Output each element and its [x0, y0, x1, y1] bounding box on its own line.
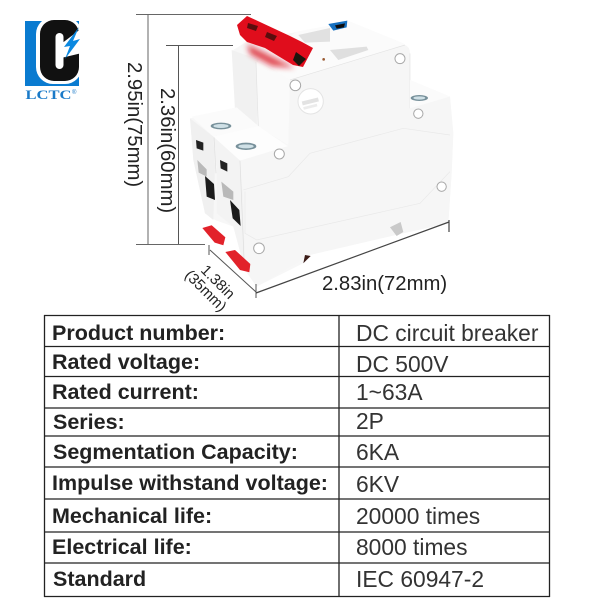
left side faces — [190, 118, 215, 220]
lower front face — [240, 97, 453, 287]
row: product number: DC circuit breaker — [356, 320, 539, 346]
upper block top face — [258, 22, 408, 80]
logo text: LCTC — [26, 88, 72, 102]
row: impulse withstand voltage: Impulse withstand voltage: — [52, 471, 328, 495]
row: series — [53, 408, 384, 434]
row: rated current — [52, 379, 423, 405]
dimension: depth 1.38in: 1.38in — [197, 262, 238, 303]
row: electrical life: 8000 times — [356, 534, 468, 560]
dimension: height 2.36in: 2.36in(60mm) — [156, 88, 178, 213]
row: segmentation capacity — [53, 439, 400, 465]
logo: LCTC — [25, 17, 82, 102]
row: mechanical life: Mechanical life: — [52, 504, 212, 528]
side slots — [196, 140, 227, 172]
dimension: depth 1.38in — [181, 245, 256, 315]
dimension: width 2.83in: 2.83in(72mm) — [322, 273, 447, 295]
slot dial — [298, 89, 323, 114]
upper block front face — [288, 45, 410, 147]
dimension: width 2.83in — [256, 220, 449, 295]
row: mechanical life: 20000 times — [356, 503, 480, 529]
row: standard — [53, 566, 484, 592]
din rail slot — [390, 222, 403, 236]
top label — [298, 28, 330, 43]
red toggle handle — [237, 16, 313, 67]
row: standard: IEC 60947-2 — [356, 566, 484, 592]
row: rated voltage: DC 500V — [356, 351, 449, 377]
dimension: height 2.95in: 2.95in(75mm) — [123, 62, 145, 187]
dimension: height 2.36in — [156, 46, 233, 244]
main body — [190, 22, 453, 287]
screws — [211, 123, 231, 129]
product photo: DC circuit breaker — [190, 16, 453, 287]
dimension: depth 1.38in: (35mm) — [181, 267, 230, 315]
red release tabs — [202, 225, 250, 272]
red glow under toggle — [247, 44, 295, 68]
upper block left face — [232, 50, 258, 127]
row: product number: Product number: — [52, 321, 225, 345]
row: segmentation capacity: Segmentation Capacity: — [53, 440, 298, 464]
row: rated current: Rated current: — [52, 380, 199, 404]
row: series: 2P — [356, 408, 384, 434]
row: product number — [52, 320, 539, 346]
row: rated voltage: Rated voltage: — [52, 350, 200, 374]
specification table — [44, 315, 550, 597]
lower terminals — [192, 107, 258, 137]
rivet holes — [254, 54, 446, 254]
row: electrical life — [52, 534, 468, 560]
dimension: height 2.95in — [123, 14, 251, 244]
row: rated voltage — [52, 350, 449, 377]
row: electrical life: Electrical life: — [52, 535, 192, 559]
row: standard: Standard — [53, 567, 146, 591]
table grid — [44, 315, 550, 597]
row: series: Series: — [53, 410, 125, 434]
row: mechanical life — [52, 503, 480, 529]
row: segmentation capacity: 6KA — [356, 439, 400, 465]
row: rated current: 1~63A — [356, 379, 423, 405]
row: impulse withstand voltage: 6KV — [356, 471, 400, 497]
logo: LCTC: ® — [72, 89, 77, 96]
